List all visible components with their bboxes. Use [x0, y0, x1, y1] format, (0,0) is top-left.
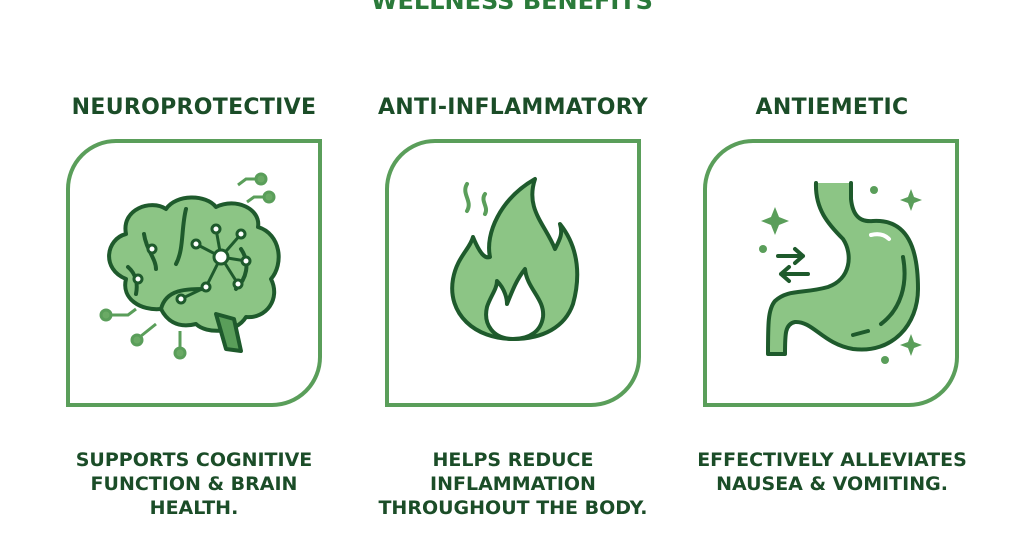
heading: anti-inflammatory: ANTI-INFLAMMATORY: [378, 95, 648, 120]
panel: anti-inflammatory: [385, 139, 641, 407]
text: antiemetic description: NAUSEA & VOMITING.: [716, 473, 948, 495]
text: neuroprotective description: FUNCTION & BRAIN: [91, 473, 297, 495]
panel: antiemetic: [703, 139, 959, 407]
text: neuroprotective description: HEALTH.: [150, 497, 238, 519]
icon: stomach: [768, 183, 918, 354]
text: anti-inflammatory description: INFLAMMATION: [430, 473, 596, 495]
icon: flame: [452, 179, 577, 339]
text: neuroprotective description: SUPPORTS COGNITIVE: [76, 449, 312, 471]
text: anti-inflammatory description: HELPS REDUCE: [433, 449, 593, 471]
text: antiemetic description: [697, 449, 967, 495]
panel: neuroprotective: [66, 139, 322, 407]
text: anti-inflammatory description: [378, 449, 648, 519]
text: neuroprotective description: [76, 449, 312, 519]
heading: antiemetic: ANTIEMETIC: [756, 95, 908, 120]
icon: brain: [109, 197, 279, 351]
text: anti-inflammatory description: THROUGHOUT THE BODY.: [378, 497, 648, 519]
heading: neuroprotective: NEUROPROTECTIVE: [72, 95, 316, 120]
text: antiemetic description: EFFECTIVELY ALLEVIATES: [697, 449, 967, 471]
